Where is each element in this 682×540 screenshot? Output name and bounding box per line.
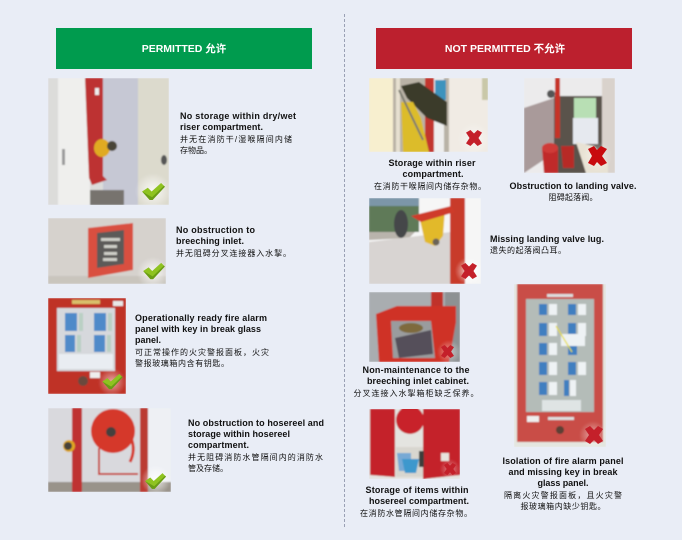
text: obstruction to landing valve: 阻碍起落阀。 xyxy=(548,192,598,202)
text: obstruction to landing valve xyxy=(510,181,636,202)
heading: permitted xyxy=(56,28,312,69)
text: no storage within riser: 存物品。 xyxy=(180,145,212,155)
text: no obstruction to hosereel: compartment. xyxy=(188,440,249,450)
photo: fire alarm panel with key xyxy=(48,298,126,394)
text: storage within riser: 在消防干喉隔间内储存杂物。 xyxy=(374,181,486,191)
text: no obstruction to hosereel: No obstruction to hosereel and xyxy=(188,418,324,428)
heading: not permitted: NOT PERMITTED 不允许 xyxy=(445,42,566,55)
photo: missing landing valve lug xyxy=(369,198,481,284)
text: obstruction to landing valve: Obstruction to landing valve. xyxy=(510,181,636,191)
text: storage of items within hosereel xyxy=(360,485,472,518)
text: non-maintenance of cabinet: Non-maintenance to the xyxy=(362,365,470,375)
photo: breeching inlet xyxy=(48,218,166,284)
heading: not permitted xyxy=(376,28,632,69)
text: operationally ready fire alarm panel: Operationally ready fire alarm xyxy=(135,313,267,323)
photo: isolated fire alarm panel xyxy=(514,284,606,447)
text: non-maintenance of cabinet: 分叉连接入水掣箱柜缺乏保养。 xyxy=(354,388,478,398)
text: no obstruction to breeching inlet: 并无阻碍分叉连接器入水掣。 xyxy=(176,248,291,258)
text: operationally ready fire alarm panel: 可正常操作的火灾警报面板，火灾 xyxy=(135,347,269,357)
text: no obstruction to breeching inlet: breeching inlet. xyxy=(176,236,244,246)
text: isolation of fire alarm panel: 报玻璃箱内缺少钥匙。 xyxy=(520,501,606,511)
text: storage of items within hosereel: 在消防水管隔间内储存杂物。 xyxy=(360,508,472,518)
text: missing landing valve lug xyxy=(490,234,604,255)
text: no storage within riser: riser compartment. xyxy=(180,122,263,132)
text: missing landing valve lug: Missing landing valve lug. xyxy=(490,234,604,244)
text: no storage within riser: No storage within dry/wet xyxy=(180,111,296,121)
text: isolation of fire alarm panel: 隔离火灾警报面板，且火灾警 xyxy=(504,490,622,500)
text: storage within riser: compartment. xyxy=(402,169,464,179)
photo: storage within riser xyxy=(369,78,488,152)
photo: clear riser compartment xyxy=(48,78,169,205)
text: storage of items within hosereel: Storage of items within xyxy=(366,485,468,495)
text: storage within riser: Storage within riser xyxy=(388,158,476,168)
text: non-maintenance of cabinet: breeching inlet cabinet. xyxy=(367,376,469,386)
text: isolation of fire alarm panel: Isolation of fire alarm panel xyxy=(502,456,624,466)
text: operationally ready fire alarm panel: 警报玻璃箱内含有钥匙。 xyxy=(135,358,229,368)
text: isolation of fire alarm panel xyxy=(502,456,624,511)
text: isolation of fire alarm panel: glass panel. xyxy=(538,478,588,488)
text: no storage within riser: 并无在消防干/湿喉隔间内储 xyxy=(180,134,292,144)
text: storage of items within hosereel: hosereel compartment. xyxy=(369,496,469,506)
text: operationally ready fire alarm panel xyxy=(135,313,269,368)
text: non-maintenance of cabinet xyxy=(354,365,478,398)
text: operationally ready fire alarm panel: panel with key in break glass xyxy=(135,324,261,334)
text: operationally ready fire alarm panel: panel. xyxy=(135,335,161,345)
text: no obstruction to hosereel: 管及存储。 xyxy=(188,463,228,473)
text: missing landing valve lug: 遗失的起落阀凸耳。 xyxy=(490,245,566,255)
photo: hosereel compartment storage xyxy=(369,409,460,479)
text: isolation of fire alarm panel: and missing key in break xyxy=(508,467,618,477)
text: no storage within riser xyxy=(180,111,296,155)
text: no obstruction to breeching inlet: No obstruction to xyxy=(176,225,256,235)
photo: hosereel xyxy=(48,408,171,492)
text: storage within riser xyxy=(374,158,486,191)
text: no obstruction to hosereel: 并无阻碍消防水管隔间内的消防水 xyxy=(188,452,323,462)
text: no obstruction to hosereel xyxy=(188,418,324,473)
photo: obstruction to landing valve xyxy=(524,78,615,173)
photo: breeching inlet cabinet xyxy=(369,292,460,362)
heading: permitted: PERMITTED 允许 xyxy=(142,42,227,55)
text: no obstruction to hosereel: storage within hosereel xyxy=(188,429,290,439)
text: no obstruction to breeching inlet xyxy=(176,225,291,258)
